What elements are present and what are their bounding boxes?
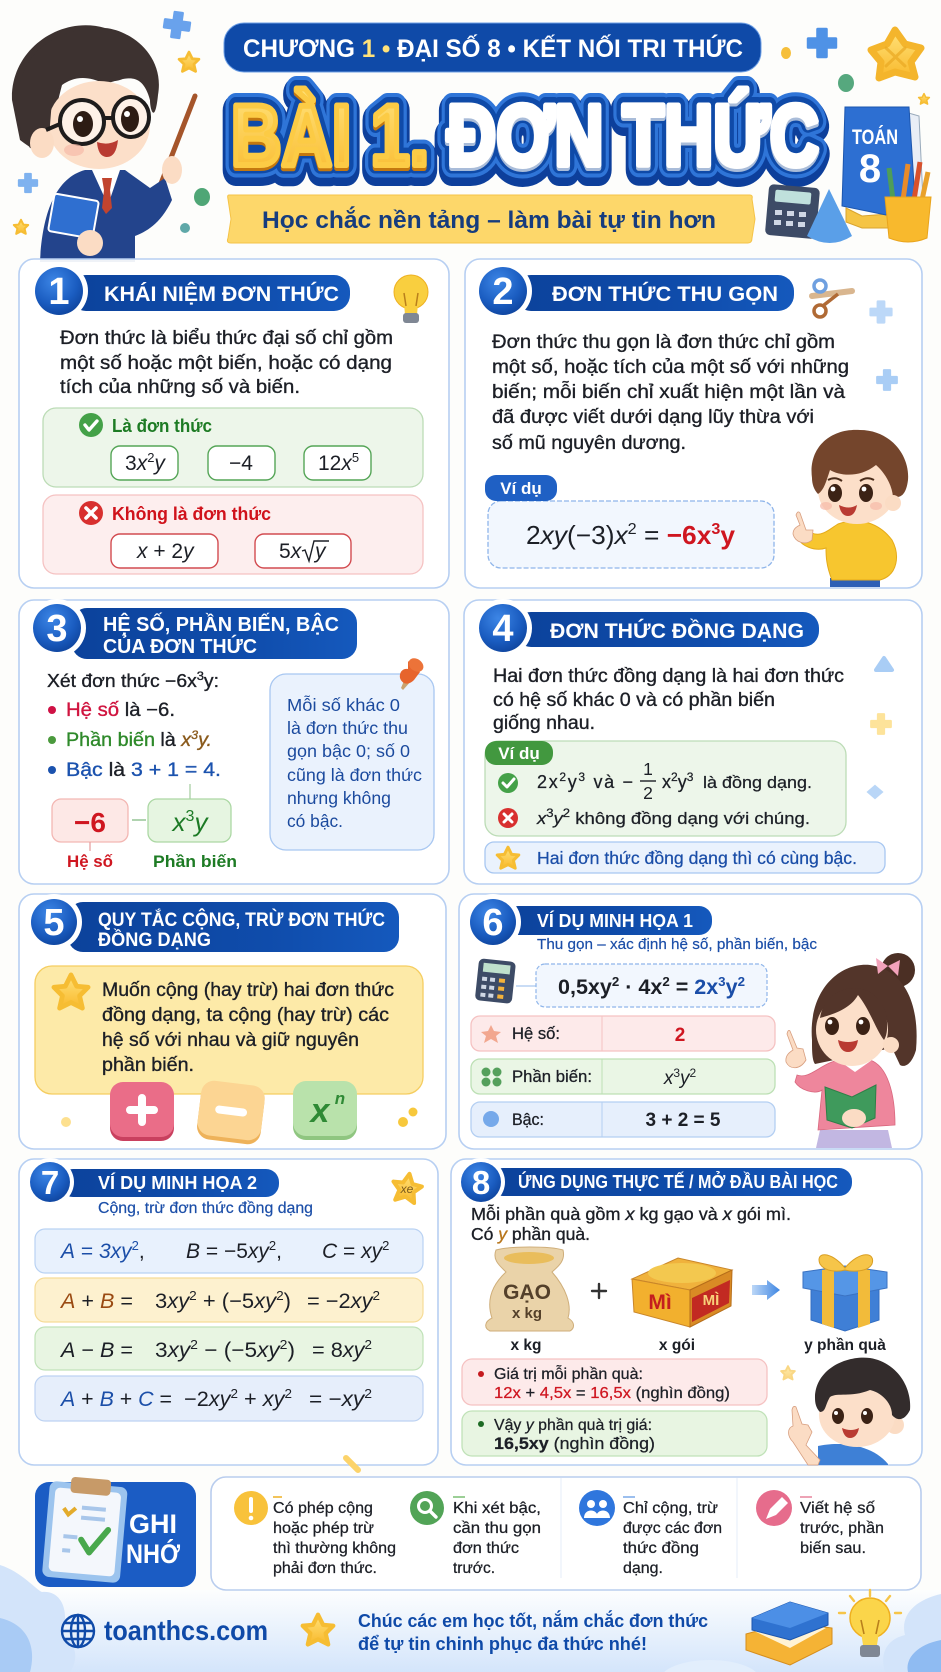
- row: A + B + C: A + B + C =: [59, 1388, 172, 1411]
- definition text: một số, hoặc tích của một số với những: [492, 357, 849, 378]
- examples: là đơn thức: y: [152, 452, 166, 475]
- note box with pin: [270, 655, 434, 850]
- section 3 heading: 3: [46, 608, 68, 650]
- row: A, B, C: 2: [132, 1238, 139, 1253]
- section 7 heading: [26, 1158, 313, 1217]
- footer message: để tự tin chinh phục đa thức nhé!: [358, 1633, 647, 1654]
- diagram: hệ số and phần biến: Hệ số: [67, 852, 113, 871]
- row: A, B, C: ,: [276, 1240, 282, 1263]
- row: A, B, C: ,: [139, 1240, 145, 1263]
- note box with pin: nhưng không: [287, 788, 391, 808]
- illustration: noodle box: Mì: [648, 1291, 672, 1314]
- icon: push pin: [400, 655, 426, 690]
- example box: 2: [643, 783, 653, 803]
- row: A − B: 2: [190, 1337, 198, 1352]
- section 6 heading: Thu gọn – xác định hệ số, phần biến, bậc: [537, 936, 818, 953]
- rule box: hệ số với nhau và giữ nguyên: [102, 1030, 359, 1051]
- tip 1: hoặc phép trừ: [273, 1520, 374, 1537]
- row: A + B: [35, 1278, 423, 1322]
- tip 3: được các đơn: [623, 1520, 722, 1537]
- example box: 2: [628, 521, 637, 538]
- term analysis list: [47, 669, 221, 781]
- term analysis list: Xét đơn thức −6 x: [47, 671, 196, 691]
- row: A, B, C: [35, 1229, 423, 1273]
- ghi nhớ badge: [35, 1475, 196, 1587]
- examples: là đơn thức: 5: [352, 450, 359, 465]
- decorative star: [781, 1366, 795, 1379]
- examples: không là đơn thức: x + 2y: [136, 540, 195, 563]
- examples: không là đơn thức: y: [313, 540, 327, 563]
- main title: BÀI 1.: [231, 88, 429, 184]
- formula box: y: [726, 976, 738, 999]
- tip 1: phải đơn thức.: [273, 1560, 377, 1577]
- term analysis list: Hệ số là −6.: [66, 700, 175, 721]
- example box: và −: [587, 772, 633, 792]
- note box with pin: Mỗi số khác 0: [287, 694, 400, 715]
- rule box: [35, 966, 423, 1094]
- term analysis list: y:: [204, 671, 219, 691]
- section 2 heading: [474, 262, 794, 320]
- tip 2: Khi xét bậc,: [453, 1500, 541, 1517]
- footer message: Chúc các em học tốt, nắm chắc đơn thức: [358, 1610, 708, 1631]
- row: phần biến: 3: [673, 1066, 680, 1080]
- example box: 2x: [537, 772, 558, 792]
- example box: không đồng dạng với chúng.: [570, 809, 810, 828]
- panel 3: hệ số, phần biến, bậc: [19, 599, 449, 884]
- tip 4: trước, phần: [800, 1520, 884, 1537]
- diagram: hệ số and phần biến: [52, 784, 237, 871]
- examples: là đơn thức: −4: [229, 452, 253, 475]
- icon: scissors: [812, 280, 852, 317]
- row: A, B, C: 2: [382, 1238, 389, 1253]
- example box: 3: [546, 806, 554, 820]
- tip 1: Có phép cộng: [273, 1500, 373, 1517]
- decorative key: [346, 1458, 358, 1470]
- row: A, B, C: 2: [269, 1238, 276, 1253]
- section 1 heading: [30, 262, 350, 320]
- row: phần biến: Phần biến:: [512, 1067, 592, 1086]
- problem text: [471, 1203, 791, 1244]
- example box: [485, 475, 774, 568]
- note box with pin: là đơn thức thu: [287, 718, 408, 738]
- rule box: Muốn cộng (hay trừ) hai đơn thức: [102, 980, 394, 1001]
- formula box: [516, 964, 767, 1007]
- row: A + B: = −2xy: [307, 1290, 372, 1313]
- tip 2: đơn thức: [453, 1540, 519, 1557]
- tip 3: Chỉ cộng, trừ: [623, 1500, 718, 1517]
- formula box: =: [670, 976, 694, 999]
- example box: 1: [643, 759, 653, 779]
- formula box: 3: [718, 974, 726, 989]
- illustration: boy in blue shirt: [788, 1358, 910, 1465]
- icon: calculator: [475, 958, 516, 1004]
- formula box: 2: [662, 974, 670, 989]
- section 6 heading: 6: [482, 902, 504, 944]
- row: hệ số: [471, 1016, 775, 1051]
- problem text: Mỗi phần quà gồm x kg gạo và x gói mì.: [471, 1203, 791, 1224]
- example box: là đồng dạng.: [703, 773, 812, 792]
- main title: ĐƠN THỨC: [447, 91, 819, 187]
- panel 1: khái niệm đơn thức: [19, 259, 449, 588]
- section 8 heading: [457, 1158, 852, 1206]
- row: bậc: [471, 1102, 775, 1137]
- illustration: rice bag: [486, 1247, 574, 1331]
- diagram: hệ số and phần biến: x: [171, 807, 187, 837]
- row: A + B: 2: [276, 1288, 284, 1303]
- main title: ĐƠN THỨC: [447, 88, 819, 184]
- tip 2: trước.: [453, 1560, 495, 1577]
- tip 3: dạng.: [623, 1560, 663, 1577]
- row: bậc: 3 + 2 = 5: [645, 1110, 721, 1131]
- examples: là đơn thức: 3x: [125, 452, 147, 475]
- section 8 heading: ỨNG DỤNG THỰC TẾ / MỞ ĐẦU BÀI HỌC: [518, 1171, 838, 1192]
- row: phần biến: [471, 1059, 775, 1094]
- row: A − B: A − B =: [59, 1339, 133, 1362]
- section 4 heading: [474, 599, 819, 657]
- total box: Vậy y phần quà trị giá:: [494, 1417, 652, 1434]
- section 6 heading: [465, 894, 818, 953]
- icon: star xe: [390, 1171, 424, 1204]
- note: same degree: Hai đơn thức đồng dạng thì có cùng bậc.: [537, 848, 857, 868]
- note box with pin: gọn bậc 0; số 0: [287, 741, 410, 761]
- main title: ĐƠN THỨC: [447, 93, 819, 189]
- tip 1: [234, 1491, 396, 1577]
- definition text: [60, 328, 393, 398]
- header pill: CHƯƠNG 1 • ĐẠI SỐ 8 • KẾT NỐI TRI THỨC: [243, 33, 743, 63]
- row: A + B + C: xy: [262, 1388, 286, 1411]
- row: A + B + C: 2: [231, 1386, 238, 1401]
- definition text: [493, 666, 844, 734]
- value box: 12x + 4,5x = 16,5x (nghìn đồng): [494, 1385, 730, 1402]
- tip 3: thức đồng: [623, 1540, 699, 1557]
- row: A − B: 2: [365, 1337, 372, 1352]
- examples: không là đơn thức: Không là đơn thức: [112, 504, 271, 524]
- illustration: rice bag: GẠO: [503, 1281, 551, 1304]
- term analysis list: 3: [191, 728, 198, 742]
- term analysis list: Bậc là 3 + 1 = 4.: [66, 760, 221, 781]
- illustration: math book, pencils, calculator, cone: [765, 107, 931, 243]
- rule box: đồng dạng, ta cộng (hay trừ) các: [102, 1005, 389, 1026]
- definition text: đã được viết dưới dạng lũy thừa với: [492, 407, 814, 428]
- definition text: [492, 332, 849, 454]
- header decorations: [14, 11, 929, 234]
- panel 8: ứng dụng thực tế: [451, 1158, 922, 1465]
- definition text: Đơn thức là biểu thức đại số chỉ gồm: [60, 328, 393, 349]
- illustration: noodle box: [632, 1258, 732, 1327]
- illustration labels: [510, 1337, 886, 1354]
- examples: là đơn thức: [43, 408, 423, 487]
- section 8 heading: 8: [472, 1164, 490, 1201]
- value box: Giá trị mỗi phần quà:: [494, 1366, 643, 1383]
- section 2 heading: ĐƠN THỨC THU GỌN: [552, 282, 778, 306]
- example box: y: [720, 520, 736, 550]
- example box: 2xy(−3)x: [526, 520, 628, 550]
- example box: y: [568, 772, 577, 792]
- row: A + B: xy: [253, 1290, 278, 1313]
- illustration: rice bag: x kg: [512, 1305, 542, 1322]
- main title: BÀI 1.: [231, 88, 429, 184]
- formula box: 2x: [694, 974, 745, 999]
- formula box: 0,5xy: [558, 976, 611, 999]
- total box: 16,5xy (nghìn đồng): [494, 1435, 655, 1453]
- row: A + B: ): [284, 1290, 291, 1313]
- row: A + B + C: +: [238, 1388, 263, 1411]
- formula box: 2: [612, 974, 619, 989]
- definition text: biến; mỗi biến chỉ xuất hiện một lần và: [492, 381, 845, 403]
- section 5 heading: [26, 894, 399, 952]
- row: A − B: − (−5: [198, 1339, 257, 1362]
- definition text: có hệ số khác 0 và có phần biến: [493, 690, 775, 711]
- illustration: gift box: [803, 1255, 887, 1331]
- example box: 2: [559, 770, 566, 784]
- row: hệ số: 2: [675, 1025, 685, 1046]
- example box: 2: [563, 806, 570, 820]
- row: A − B: [35, 1327, 423, 1370]
- section 5 heading: 5: [43, 902, 65, 944]
- row: hệ số: Hệ số:: [512, 1024, 560, 1043]
- example box: =: [637, 520, 667, 550]
- plus sign: [592, 1284, 606, 1298]
- examples: không là đơn thức: [43, 495, 423, 574]
- tip 1: thì thường không: [273, 1540, 396, 1557]
- row: A + B: 2: [189, 1288, 197, 1303]
- row: A + B: + (−5: [197, 1290, 254, 1313]
- note box with pin: có bậc.: [287, 811, 343, 831]
- panel 4: đơn thức đồng dạng: [464, 599, 922, 884]
- total box: [462, 1411, 767, 1456]
- row: A − B: = 8xy: [312, 1339, 364, 1362]
- example box: y: [678, 772, 687, 792]
- row: A − B: 2: [280, 1337, 287, 1352]
- decorative dots: [61, 1108, 418, 1127]
- term analysis list: y.: [196, 730, 212, 751]
- example box: Ví dụ: [500, 479, 542, 498]
- problem text: Có y phần quà.: [471, 1224, 590, 1244]
- main title: BÀI 1.: [231, 93, 429, 189]
- illustration: books and light bulb: [746, 1590, 901, 1665]
- row: A + B + C: [35, 1376, 423, 1421]
- example box: 2: [671, 770, 678, 784]
- subtitle ribbon: Học chắc nền tảng – làm bài tự tin hơn: [262, 206, 716, 234]
- tip 3: [579, 1490, 722, 1577]
- arrow: [752, 1280, 780, 1300]
- footer message: [303, 1610, 708, 1654]
- example box: 3: [578, 770, 585, 784]
- footer website: toanthcs.com: [104, 1615, 268, 1646]
- example box: y: [552, 809, 564, 828]
- row: A, B, C: B = −5xy: [186, 1240, 269, 1263]
- row: phần biến: y: [678, 1068, 691, 1089]
- main title: BÀI 1.: [231, 88, 429, 184]
- math tiles: [110, 1079, 357, 1146]
- row: phần biến: x: [663, 1068, 675, 1089]
- tip 4: [756, 1490, 884, 1557]
- row: A + B: A + B =: [59, 1290, 133, 1313]
- section 7 heading: 7: [41, 1164, 59, 1201]
- formula box: · 4x: [619, 976, 663, 999]
- tip 2: cần thu gọn: [453, 1520, 541, 1537]
- section 3 heading: HỆ SỐ, PHẦN BIẾN, BẬC: [103, 612, 339, 636]
- examples: là đơn thức: 2: [147, 450, 154, 465]
- row: A, B, C: A = 3xy: [61, 1240, 132, 1263]
- example box: 3: [687, 770, 694, 784]
- main title: [231, 88, 819, 189]
- ghi nhớ badge: GHI: [129, 1509, 177, 1539]
- row: A + B + C: −2xy: [184, 1388, 230, 1411]
- value box: [462, 1359, 767, 1405]
- row: A − B: xy: [256, 1339, 281, 1362]
- section 5 heading: QUY TẮC CỘNG, TRỪ ĐƠN THỨC: [98, 909, 385, 931]
- illustration: girl with book: [786, 953, 917, 1148]
- subtitle ribbon: [227, 195, 755, 243]
- icon: light bulb: [394, 275, 428, 323]
- main title: ĐƠN THỨC: [447, 88, 819, 184]
- section 2 heading: 2: [492, 271, 514, 313]
- row: A + B + C: = −xy: [309, 1388, 363, 1411]
- row: A + B + C: 2: [364, 1386, 372, 1401]
- definition text: Đơn thức thu gọn là đơn thức chỉ gồm: [492, 332, 835, 353]
- examples: là đơn thức: 12x: [318, 452, 352, 475]
- illustration: math book, pencils, calculator, cone: 8: [859, 147, 881, 191]
- definition text: tích của những số và biến.: [60, 377, 300, 398]
- illustration: boy in yellow hoodie: [793, 430, 908, 587]
- section 1 heading: KHÁI NIỆM ĐƠN THỨC: [104, 282, 339, 306]
- note box with pin: cũng là đơn thức: [287, 765, 422, 785]
- row: A, B, C: C = xy: [322, 1240, 382, 1263]
- icon: clipboard: [42, 1475, 128, 1583]
- panel: ghi nhớ tips: [211, 1477, 921, 1590]
- definition text: một số hoặc một biến, hoặc có dạng: [60, 353, 392, 374]
- tip 4: Viết hệ số: [800, 1500, 875, 1517]
- header pill: [224, 23, 761, 72]
- row: A − B: ): [287, 1339, 295, 1362]
- ghi nhớ badge: NHỚ: [126, 1538, 180, 1569]
- illustration labels: y phần quà: [804, 1337, 886, 1354]
- main title: BÀI 1.: [231, 91, 429, 187]
- definition text: giống nhau.: [493, 713, 595, 734]
- formula box: 2: [738, 974, 745, 989]
- row: bậc: Bậc:: [512, 1110, 544, 1129]
- examples: không là đơn thức: 5x: [279, 540, 303, 563]
- row: A + B: 2: [372, 1288, 380, 1303]
- section 1 heading: 1: [48, 271, 70, 313]
- panel 5: quy tắc cộng, trừ: [19, 894, 446, 1149]
- main title: ĐƠN THỨC: [447, 88, 819, 184]
- row: phần biến: 2: [690, 1066, 696, 1080]
- row: A + B + C: 2: [285, 1386, 292, 1401]
- row: A − B: 3xy: [155, 1339, 189, 1362]
- note: same degree: [485, 842, 885, 873]
- definition text: Hai đơn thức đồng dạng là hai đơn thức: [493, 666, 844, 687]
- illustration: teacher boy with pointer: [12, 25, 195, 262]
- section 6 heading: VÍ DỤ MINH HỌA 1: [537, 910, 693, 931]
- section 7 heading: VÍ DỤ MINH HỌA 2: [98, 1172, 257, 1193]
- section 3 heading: CỦA ĐƠN THỨC: [103, 634, 257, 658]
- tip 2: [410, 1491, 541, 1577]
- section 4 heading: 4: [492, 608, 514, 650]
- section 4 heading: ĐƠN THỨC ĐỒNG DẠNG: [550, 619, 804, 643]
- row: A + B: 3xy: [155, 1290, 188, 1313]
- panel 2: đơn thức thu gọn: [465, 259, 922, 588]
- math tiles: x: [309, 1092, 332, 1130]
- diagram: hệ số and phần biến: y: [192, 807, 209, 837]
- decorative shapes: [868, 658, 892, 798]
- example box: Ví dụ: [498, 744, 540, 763]
- section 3 heading: [28, 599, 357, 659]
- footer background with clouds: [0, 1565, 941, 1672]
- math tiles: n: [335, 1089, 345, 1108]
- panel 6: ví dụ minh họa 1: [459, 894, 922, 1149]
- decorative plus icons: [871, 302, 897, 390]
- diagram: hệ số and phần biến: −6: [74, 807, 106, 838]
- example box: 3: [711, 521, 720, 538]
- illustration labels: x gói: [659, 1337, 695, 1354]
- example box: [485, 741, 846, 836]
- illustration: math book, pencils, calculator, cone: TOÁN: [852, 126, 898, 149]
- diagram: hệ số and phần biến: Phần biến: [153, 852, 237, 871]
- illustration: noodle box: MÌ: [703, 1292, 719, 1309]
- panel 7: ví dụ minh họa 2: [19, 1158, 438, 1470]
- section 5 heading: ĐỒNG DẠNG: [98, 929, 211, 951]
- section 7 heading: Cộng, trừ đơn thức đồng dạng: [98, 1200, 313, 1217]
- illustration labels: x kg: [510, 1337, 542, 1354]
- diagram: hệ số and phần biến: 3: [186, 808, 195, 825]
- definition text: số mũ nguyên dương.: [492, 433, 686, 454]
- rule box: phần biến.: [102, 1055, 194, 1076]
- tip 4: biến sau.: [800, 1540, 866, 1557]
- icon: star xe: xe: [400, 1182, 414, 1196]
- example box: x: [662, 772, 671, 792]
- term analysis list: Phần biến là x: [66, 730, 191, 751]
- term analysis list: 3: [197, 669, 204, 683]
- examples: là đơn thức: Là đơn thức: [112, 416, 212, 436]
- example box: −6x: [667, 520, 736, 550]
- example box: x: [536, 809, 547, 828]
